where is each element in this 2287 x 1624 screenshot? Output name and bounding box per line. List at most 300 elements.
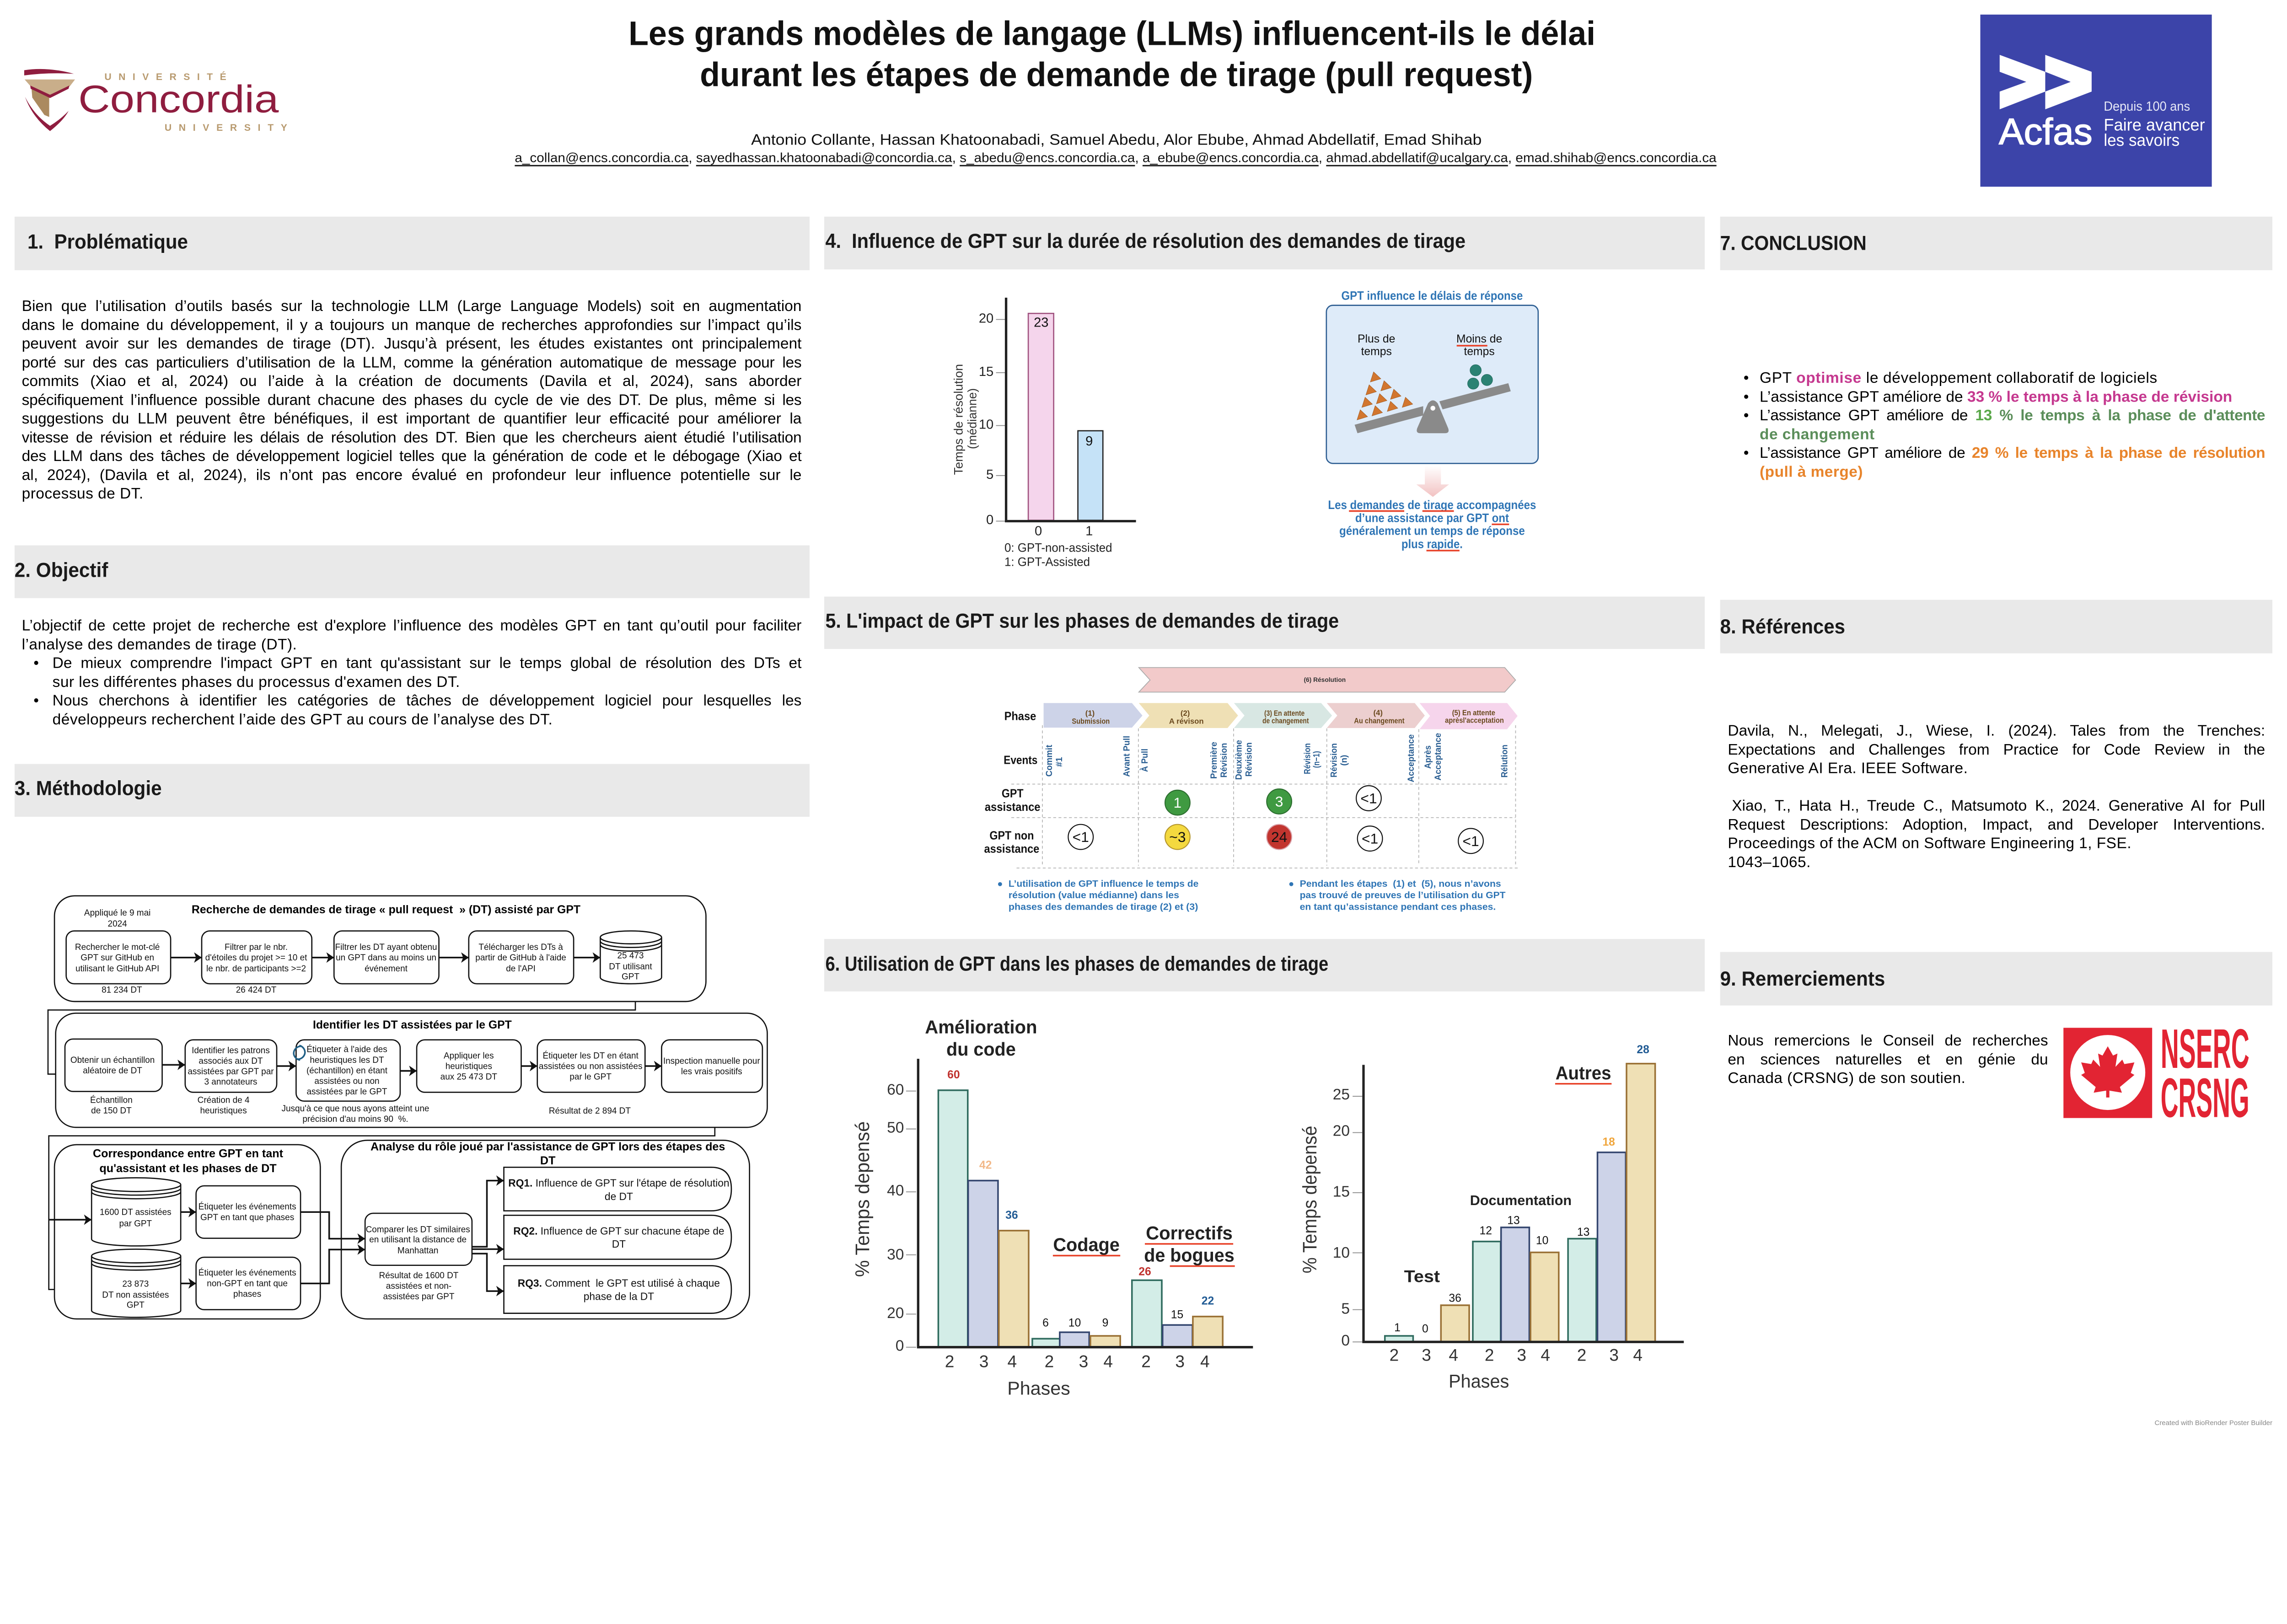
flow group: analysis of GPT role: RQ1. Influence de GPT sur l'étape de résolution [508,1177,730,1189]
bar chart: left: 50 [887,1119,904,1136]
bar chart: right: 13 [1577,1226,1589,1238]
text block: finding: d’une assistance par GPT ont [1355,511,1509,525]
bar chart: median resolution time: 0 [986,513,993,527]
flow group: identify GPT-assisted PRs: heuristiques [446,1061,492,1071]
flow group: PR search: le nbr. de participants >=2 [206,964,306,974]
bar chart: median resolution time: 5 [986,467,993,482]
markers: GPT assistance: <1 [1360,790,1377,806]
flow group: identify GPT-assisted PRs: assistées par GPT par [188,1067,274,1077]
flow group: identify GPT-assisted PRs: heuristiques [200,1106,247,1115]
icon: maple leaf [2081,1046,2134,1098]
icon: loop arrows [294,1045,305,1060]
text block: finding: plus rapide. [1401,537,1463,551]
flow group: matching GPT assistant and PR phases: GPT [127,1300,145,1310]
panel: 7. Conclusion: • [1744,388,1749,405]
illustration: balance of response time: GPT influence le délais de réponse [1341,289,1523,302]
bar chart: right: 15 [1333,1184,1350,1201]
bar chart: right [1299,1044,1684,1392]
timeline: phases: de changement [1262,717,1309,725]
heading: Objectif [15,545,810,598]
text block: acknowledgements: en sciences naturelles et en génie du [1728,1051,2048,1068]
flow group: matching GPT assistant and PR phases: phases [233,1290,261,1299]
labels: events: Acceptance [1406,734,1416,783]
flow group: PR search: Rechercher le mot-clé [75,943,160,952]
footer credit: Created with BioRender Poster Builder [2154,1419,2272,1426]
bar chart: right: Phases [1449,1371,1509,1392]
flow group: identify GPT-assisted PRs: aléatoire de DT [83,1066,142,1076]
flow group: analysis of GPT role: Résultat de 1600 DT [379,1271,459,1281]
bar chart: right: 5 [1341,1300,1350,1317]
bar chart: right: 3 [1517,1345,1526,1364]
y axis label: (médianne) [965,388,979,449]
text block: conclusion bullets [1760,369,2265,481]
note: right bullet: en tant qu’assistance pendant ces phases. [1300,902,1496,912]
text block: objectives: L’objectif de cette projet de recherche est d'explore l’influence des modèles GPT en tant qu’outil pour faciliter [22,617,801,634]
text block: problem statement: dans le domaine du développement, il y a toujours un manque de recherches approfondies sur l’impact qu’ils [22,316,801,333]
bar chart: left: du code [946,1039,1016,1060]
flow group: analysis of GPT role: RQ3. Comment le GPT est utilisé à chaque [518,1277,720,1289]
flow group: matching GPT assistant and PR phases: par GPT [119,1219,152,1228]
bar chart: right: 2 [1485,1345,1494,1364]
flow group: PR search: de l'API [506,964,536,974]
note: right bullet: Pendant les étapes (1) et (5), nous n’avons [1300,879,1501,889]
text block: finding [1328,498,1536,551]
panel: 7. Conclusion [1720,217,2272,491]
heading: conclusion: 7. CONCLUSION [1720,232,1867,254]
row labels: Events [1004,754,1037,766]
icon: Concordia shield [24,69,75,131]
bar chart: median resolution time [952,298,1136,569]
text block: objectives: Nous cherchons à identifier les catégories de tâches de développement logiciel pour lesquelles les [53,692,801,709]
flow group: matching GPT assistant and PR phases [54,1145,320,1319]
title [628,15,1595,94]
arrow: phase 6 résolution: (6) Résolution [1304,676,1346,683]
markers: GPT non assistance: ~3 [1169,829,1186,845]
flow group: identify GPT-assisted PRs: Identifier les patrons [192,1046,270,1056]
text block: objectives: sur les différentes phases du processus d'examen des DT. [53,673,460,690]
flow group: PR search: partir de GitHub à l'aide [475,953,566,963]
bar chart: right: 1 [1394,1322,1401,1334]
flow group: matching GPT assistant and PR phases: Étiqueter les événements [199,1202,296,1211]
text block: acknowledgements: Nous remercions le Conseil de recherches [1728,1032,2048,1049]
labels: events: Deuxième [1234,740,1244,780]
flow group: PR search: DT utilisant [609,962,652,972]
flow group: PR search: Recherche de demandes de tirage « pull request » (DT) assisté par GPT [192,903,581,916]
heading: remerciements: 9. Remerciements [1720,968,1885,990]
text block: conclusion bullets: L’assistance GPT améliore de 29 % le temps à la phase de résolution [1760,445,2265,461]
text block: references: Davila, N., Melegati, J., Wiese, I. (2024). Tales from the Trenches: [1728,723,2265,740]
flow group: identify GPT-assisted PRs: 3 annotateurs [204,1077,257,1087]
labels: events: Révision [1244,742,1254,777]
bar chart: right: 18 [1602,1136,1615,1148]
bar chart: median resolution time: 9 [1085,434,1093,449]
flow group: PR search: Télécharger les DTs à [478,943,563,952]
heading: influence de GPT [824,217,1705,269]
panel: 7. Conclusion: • [1744,407,1749,424]
flow group: identify GPT-assisted PRs: par le GPT [569,1072,612,1082]
logo: Acfas: Depuis 100 ans [2104,99,2190,113]
bar chart: median resolution time: 15 [979,364,993,379]
bar chart: left: 26 [1138,1265,1151,1278]
bar chart: left: Codage [1053,1234,1120,1255]
note: left bullet [998,879,1198,912]
text block: acknowledgements [1728,1031,2048,1088]
title: Les grands modèles de langage (LLMs) influencent-ils le délai [628,15,1595,53]
arrow: down to conclusion [1417,466,1449,497]
flow group: identify GPT-assisted PRs: assistées par le GPT [307,1087,387,1097]
bar chart: right: Documentation [1470,1192,1572,1208]
bar chart: right: 0 [1341,1332,1350,1349]
flow group: analysis of GPT role: Comparer les DT similaires [366,1225,470,1235]
bar chart: left: % Temps depensé [852,1121,873,1277]
flow group: PR search: GPT [622,972,639,982]
flow group: PR search: Filtrer les DT ayant obtenu [335,943,437,952]
bar chart: left: 22 [1202,1295,1214,1308]
timeline: phases: Au changement [1354,717,1405,725]
flow group: identify GPT-assisted PRs: assistées ou non assistées [539,1061,642,1071]
flow group: identify GPT-assisted PRs: précision d'au moins 90 %. [302,1115,408,1124]
labels: events: Révision [1329,743,1339,777]
flow group: identify GPT-assisted PRs: les vrais positifs [681,1067,742,1077]
heading: utilisation [824,939,1705,992]
heading: Méthodologie: 3. Méthodologie [15,777,162,800]
flow group: PR search: Filtrer par le nbr. [225,943,288,952]
bar chart: left: 60 [887,1082,904,1099]
logo: NSERC CRSNG [2063,1028,2253,1118]
flow group: identify GPT-assisted PRs: Obtenir un échantillon [70,1056,155,1065]
bar chart: median resolution time: 23 [1034,316,1048,330]
flow group: analysis of GPT role: assistées et non- [386,1281,451,1291]
bar chart: median resolution time: 20 [979,311,993,326]
illustration: balance of response time: temps [1464,346,1495,358]
flow group: identify GPT-assisted PRs: Étiqueter les DT en étant [543,1051,639,1061]
text block: problem statement: commits (Xiao et al, 2024) ou l’aide à la création de documents (Davila et al, 2024), sans aborder [22,373,801,390]
bar chart: right: 2 [1390,1345,1399,1364]
bar chart: left: 36 [1005,1209,1018,1222]
author emails: a_collan@encs.concordia.ca, sayedhassan.khatoonabadi@concordia.ca , s_abedu@encs.concordia.ca, a_ebube@encs.concordia.ca, ahmad.abdellatif@ucalgary.ca, emad.shihab@encs.concordia.ca [515,151,1717,166]
flow group: analysis of GPT role: en utilisant la distance de [369,1235,467,1245]
row labels: Phase [1004,710,1036,723]
row labels: assistance [984,842,1039,855]
bar chart: right: 12 [1479,1225,1492,1237]
bar chart: right: 4 [1633,1345,1643,1364]
y axis label [952,364,979,475]
heading: utilisation: 6. Utilisation de GPT dans les phases de demandes de tirage [825,953,1328,975]
bar chart: right: Autres [1556,1062,1611,1083]
text block: problem statement: des LLM dans des tâches de développement logiciel telles que la génération de code et le débogage (Xiao et [22,448,801,465]
labels: events: Révision [1219,743,1229,777]
text block: problem statement: Bien que l’utilisation d’outils basés sur la technologie LLM (Large Language Models) soit en augmentation [22,298,801,315]
illustration: balance of response time: Plus de [1358,333,1395,345]
bar chart: left: 4 [1103,1352,1113,1371]
text block: conclusion bullets: de changement [1760,426,1875,443]
heading: phases: 5. L'impact de GPT sur les phases de demandes de tirage [825,610,1339,632]
bar chart: left: 60 [947,1069,960,1081]
text block: references: Request Descriptions: Adoption, Impact, and Developer Interventions. [1728,816,2265,833]
flow group: PR search: 81 234 DT [102,986,142,995]
text block: problem statement: suggestions du LLM peuvent être bénéfiques, il est important de quantifier leur efficacité pour améliorer la [22,410,801,427]
bar chart: median resolution time: 10 [979,418,993,432]
labels: events: (n) [1339,755,1349,766]
flow group: identify GPT-assisted PRs: Identifier les DT assistées par le GPT [313,1018,512,1031]
flow group: identify GPT-assisted PRs: Jusqu'à ce que nous ayons atteint une [282,1104,429,1114]
logo: Concordia University: UNIVERSITY [165,123,287,133]
row labels: GPT [1002,788,1024,800]
flow group: identify GPT-assisted PRs: associés aux DT [199,1056,263,1066]
logo: Acfas [1980,15,2212,187]
heading: Problématique [15,217,810,270]
timeline: phases: (5) En attente [1452,708,1495,717]
flow group: analysis of GPT role: phase de la DT [584,1291,654,1302]
flow group: PR search: Appliqué le 9 mai [84,908,150,918]
illustration: balance of response time: temps [1361,346,1392,358]
text block: problem statement: processus de DT. [22,485,144,502]
flow group: analysis of GPT role [301,1140,750,1319]
text block: objectives: • [33,692,39,709]
timeline: phases: aprèsl'acceptation [1445,716,1504,725]
flow group: identify GPT-assisted PRs: de 150 DT [91,1106,132,1115]
connector: identify to matching [49,1092,715,1290]
text block: finding: généralement un temps de réponse [1339,524,1525,538]
text block: references: Xiao, T., Hata H., Treude C., Matsumoto K., 2024. Generative AI for Pull [1732,798,2265,815]
bar chart: right: 25 [1333,1086,1350,1103]
flow group: identify GPT-assisted PRs: Inspection manuelle pour [663,1056,760,1066]
markers: GPT non assistance: <1 [1073,829,1089,845]
text block: objectives: l’analyse des demandes de tirage (DT). [22,636,297,653]
flow group: matching GPT assistant and PR phases: DT non assistées [102,1290,169,1300]
bar chart: right: 4 [1449,1345,1458,1364]
note: right bullet: pas trouvé de preuves de l’utilisation du GPT [1300,890,1506,900]
logo: Concordia University: UNIVERSITÉ [104,71,226,82]
panel: 6. Utilisation de GPT [824,939,1705,1403]
arrow: phase 6 résolution [1139,668,1515,692]
heading: références [1720,600,2272,654]
text block: finding: Les demandes de tirage accompagnées [1328,498,1536,512]
bar chart: left: 4 [1007,1352,1017,1371]
labels: events: Commit [1044,745,1054,777]
timeline: phases: (1) [1085,709,1095,718]
illustration: balance of response time: Moins de [1456,333,1502,345]
panel: 7. Conclusion: • [1744,370,1749,386]
bar chart: right: 13 [1507,1214,1520,1227]
bar chart: left: 30 [887,1246,904,1263]
markers: GPT non assistance: <1 [1362,831,1378,847]
text block: objectives [22,616,801,729]
heading: influence de GPT: 4. Influence de GPT sur la durée de résolution des demandes de tirage [825,230,1466,252]
labels: events: Rélution [1500,745,1510,777]
panel: 7. Conclusion: • [1744,445,1749,461]
bar chart: left: 6 [1042,1317,1049,1329]
bar chart: left: 9 [1102,1317,1108,1329]
timeline: phases: (3) En attente [1264,709,1305,718]
flow group: PR search: événement [365,964,408,974]
timeline: phases: Submission [1072,717,1110,725]
title: durant les étapes de demande de tirage (pull request) [700,56,1533,94]
bar chart: left: 2 [1045,1352,1054,1371]
y axis label: Temps de résolution [952,364,966,475]
flow group: matching GPT assistant and PR phases: qu'assistant et les phases de DT [99,1162,277,1175]
flow group: PR search: 2024 [108,919,127,929]
bar chart: left: 2 [1141,1352,1151,1371]
bar chart: left: 2 [945,1352,954,1371]
flow group: PR search [54,896,706,1002]
markers: GPT non assistance [1068,825,1483,853]
logo: Acfas: Acfas [1999,111,2093,152]
icon: orange triangles [1357,372,1413,420]
bar chart: left: de bogues [1144,1245,1235,1266]
text block: references: Generative AI Era. IEEE Software. [1728,760,1968,777]
labels: events [1044,733,1510,783]
panel: 4. Influence de GPT [824,217,1705,592]
icon: seesaw [1355,383,1511,433]
text block: conclusion bullets: GPT optimise le développement collaboratif de logiciels [1760,370,2158,386]
timeline: phases: (2) [1181,709,1190,718]
bar chart: left: 15 [1171,1309,1183,1321]
text block: references: 1043–1065. [1728,854,1811,871]
panel: 5. L'impact de GPT sur les phases [824,596,1705,931]
bar chart: left: 42 [979,1159,992,1171]
bar chart: left: Correctifs [1146,1222,1233,1243]
labels: events: À Pull [1139,749,1150,772]
row labels: assistance [985,801,1041,814]
heading: références: 8. Références [1720,616,1845,638]
bar chart: left: 3 [979,1352,988,1371]
heading: phases [824,596,1705,649]
heading: Objectif: 2. Objectif [15,559,108,582]
text block: problem statement: porté sur des cas particuliers d’utilisation de la LLM, comme la génération automatique de message pour les [22,354,801,371]
bar chart: right: 20 [1333,1122,1350,1139]
bar chart: right: 10 [1333,1244,1350,1261]
text block: problem statement: vitesse de révision et réduire les délais de résolution des DT. Bien que les chercheurs aient étudié l’utilisation [22,429,801,446]
bar chart: median resolution time: 1: GPT-Assisted [1004,555,1090,569]
bar chart: right: 36 [1449,1292,1461,1304]
flow group: identify GPT-assisted PRs: aux 25 473 DT [440,1072,497,1082]
bar chart: left: Phases [1007,1378,1070,1399]
flow group: analysis of GPT role: DT [540,1154,556,1167]
flow group: matching GPT assistant and PR phases: 23 873 [122,1280,149,1289]
markers: GPT assistance: 3 [1275,793,1283,809]
labels: events: Révision [1302,743,1312,774]
text block: conclusion bullets: L’assistance GPT améliore de 13 % le temps à la phase de d'attente [1760,407,2265,424]
flow group: identify GPT-assisted PRs: Appliquer les [444,1051,494,1061]
bar chart: left: 4 [1200,1352,1210,1371]
note: left bullet: L’utilisation de GPT influence le temps de [1009,879,1198,889]
flow group: PR search: un GPT dans au moins un [336,953,436,963]
labels: events: Après [1423,745,1433,769]
flow group: analysis of GPT role: DT [612,1238,626,1250]
flow group: PR search: GPT sur GitHub en [81,953,154,963]
bar chart: left: 3 [1175,1352,1185,1371]
bar chart: right: Test [1404,1266,1440,1286]
bar chart: right: 3 [1422,1345,1431,1364]
flow group: analysis of GPT role: assistées par GPT [383,1292,455,1302]
note: left bullet: phases des demandes de tirage (2) et (3) [1009,902,1198,912]
panel: 1. Problématique [15,217,810,535]
flow group: analysis of GPT role: Manhattan [397,1246,438,1255]
row labels: GPT non [989,829,1034,842]
bar chart: median resolution time: 0 [1035,524,1042,539]
heading: Méthodologie [15,764,810,817]
markers: GPT non assistance: <1 [1462,833,1479,849]
note: right bullet [1289,879,1506,912]
flow group: identify GPT-assisted PRs: heuristiques les DT [310,1056,384,1065]
authors: Antonio Collante, Hassan Khatoonabadi, Samuel Abedu, Alor Ebube, Ahmad Abdellatif, Emad Shihab [751,132,1482,149]
labels: events: Première [1209,742,1219,779]
labels: events: (n−1) [1312,751,1322,768]
flow group: identify GPT-assisted PRs: Étiqueter à l'aide des [306,1045,387,1054]
flow group: identify GPT-assisted PRs [56,1013,767,1127]
flow group: PR search: 26 424 DT [236,986,277,995]
title block [512,12,1723,169]
bar chart: right: 3 [1609,1345,1619,1364]
flow group: identify GPT-assisted PRs: Échantillon [90,1095,133,1105]
flow group: analysis of GPT role: RQ2. Influence de GPT sur chacune étape de [513,1225,725,1237]
labels: events: Acceptance [1433,733,1443,781]
panel: 3. Méthodologie [15,764,810,1329]
flow group: analysis of GPT role: de DT [605,1190,633,1202]
text block: objectives: développeurs recherchent l’aide des GPT au cours de l’analyse des DT. [53,711,553,728]
flow group: PR search: d'étoiles du projet >= 10 et [205,953,307,963]
panel: 8. Références [1720,600,2272,874]
timeline: phases: A révison [1169,717,1204,725]
bar chart: right: 28 [1637,1044,1649,1056]
text block: problem statement: al, 2024), (Davila et al, 2024), ils n’ont pas encore évalué en profondeur leur influence potentielle sur le [22,466,801,483]
illustration: balance of response time [1326,289,1538,551]
text block: references: Expectations and Challenges from Practice for Code Review in the [1728,741,2265,758]
bar chart: right: 4 [1541,1345,1550,1364]
bar chart: left: 0 [896,1338,904,1355]
note: left bullet: résolution (value médianne) dans les [1009,890,1179,900]
text block: acknowledgements: Canada (CRSNG) de son soutien. [1728,1070,1965,1087]
flow group: PR search: 25 473 [617,951,644,961]
timeline: phases [1044,703,1518,729]
bar chart: left: 40 [887,1182,904,1199]
flow group: identify GPT-assisted PRs: (échantillon) en étant [306,1066,388,1076]
flow group: matching GPT assistant and PR phases: Étiqueter les événements [199,1268,296,1278]
markers: GPT non assistance: 24 [1271,829,1287,845]
logo: Acfas: Faire avancer [2104,115,2205,134]
flow group: PR search: utilisant le GitHub API [75,964,159,974]
text block: references [1728,722,2265,872]
text block: conclusion bullets: L’assistance GPT améliore de 33 % le temps à la phase de révision [1760,388,2232,405]
bar chart: left: Amélioration [925,1016,1037,1037]
bar chart: right: 10 [1536,1234,1548,1247]
bar chart: median resolution time: 0: GPT-non-assisted [1004,541,1112,555]
flow group: matching GPT assistant and PR phases: Correspondance entre GPT en tant [93,1147,284,1160]
icon: green circles [1468,364,1492,389]
heading: Problématique: 1. Problématique [27,231,188,253]
flow group: matching GPT assistant and PR phases: GPT en tant que phases [200,1213,294,1222]
heading: remerciements [1720,952,2272,1006]
logo: Concordia University: Concordia [78,77,279,121]
bar chart: left: 10 [1068,1317,1081,1329]
bar chart: left: 3 [1079,1352,1088,1371]
row labels [984,710,1041,855]
flow group: identify GPT-assisted PRs: Création de 4 [198,1095,249,1105]
text block: problem statement: peuvent avoir sur les demandes de tirage (DT). Jusqu’à présent, les études existantes ont principalement [22,335,801,352]
markers: GPT assistance: 1 [1174,794,1181,811]
connector: search to identify [48,984,635,1074]
timeline: phases: (4) [1373,708,1383,717]
logo: Concordia University [20,64,295,137]
flow group: analysis of GPT role: Analyse du rôle joué par l'assistance de GPT lors des étapes des [370,1140,725,1153]
markers: GPT assistance [1165,786,1381,815]
heading: conclusion [1720,217,2272,270]
bar chart: left [852,1016,1253,1399]
text block: problem statement: spécifiquement l’influence possible durant chacune des phases du cycle de vie des DT. De plus, même si les [22,391,801,408]
arrow: branch to assisted PRs [49,1219,91,1221]
flow group: identify GPT-assisted PRs: assistées ou non [314,1077,380,1086]
